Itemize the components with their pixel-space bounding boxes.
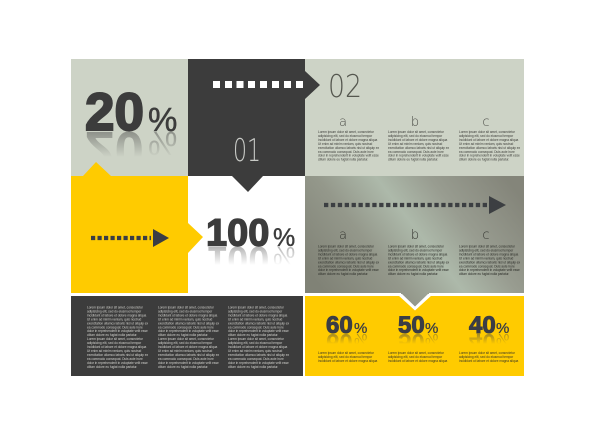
- column b: adipisicing elit, sed do eiusmod tempor: [388, 248, 442, 252]
- column b: cillum dolore eu fugiat nulla pariatur.: [388, 272, 438, 276]
- reflections: 50: [398, 328, 425, 355]
- stat: 40%: 40: [469, 312, 496, 339]
- text column 3: ea commodo consequat. Duis aute irure: [228, 325, 284, 329]
- column c: ea commodo consequat. Duis aute irure: [459, 150, 515, 154]
- text column 1: Ut enim ad minim veniam, quis nostrud: [87, 349, 142, 353]
- stat: 50%: 50: [398, 312, 425, 339]
- panel: dark text: [71, 296, 303, 376]
- reflections: %: [354, 330, 367, 347]
- column a: [318, 228, 380, 276]
- text column 2: dolor in reprehenderit in voluptate velit esse: [158, 329, 219, 333]
- column a: incididunt ut labore et dolore magna aliqua: [318, 252, 377, 256]
- text column 3: dolor in reprehenderit in voluptate velit esse: [228, 329, 289, 333]
- caption 40%: Lorem ipsum dolor sit amet, consectetur: [459, 351, 515, 355]
- column c: [459, 228, 521, 276]
- stat: 50%: %: [425, 320, 438, 337]
- panel: white 100%: [188, 176, 305, 293]
- column b: ea commodo consequat. Duis aute irure: [388, 150, 444, 154]
- text column 2: cillum dolore eu fugiat nulla pariatur.: [158, 365, 208, 369]
- column a: cillum dolore eu fugiat nulla pariatur.: [318, 272, 368, 276]
- caption 50%: Lorem ipsum dolor sit amet, consectetur: [388, 351, 444, 355]
- column c: exercitation ullamco laboris nisi ut aliquip ex: [459, 260, 521, 264]
- text column 3: dolor in reprehenderit in voluptate velit esse: [228, 361, 289, 365]
- text column 1: incididunt ut labore et dolore magna aliqua: [87, 313, 146, 317]
- text column 1: cillum dolore eu fugiat nulla pariatur.: [87, 365, 137, 369]
- caption 50%: adipisicing elit, sed do eiusmod tempor: [388, 355, 442, 359]
- text column 1: adipisicing elit, sed do eiusmod tempor: [87, 341, 141, 345]
- column b: exercitation ullamco laboris nisi ut aliquip ex: [388, 146, 450, 150]
- stat: 20%: [85, 83, 177, 142]
- text column 3: Lorem ipsum dolor sit amet, consectetur: [228, 337, 284, 341]
- column b: Lorem ipsum dolor sit amet, consectetur: [388, 130, 444, 134]
- text column 2: adipisicing elit, sed do eiusmod tempor: [158, 341, 212, 345]
- column b: incididunt ut labore et dolore magna aliqua: [388, 252, 447, 256]
- text column 2: exercitation ullamco laboris nisi ut aliquip ex: [158, 321, 220, 325]
- text column 1: cillum dolore eu fugiat nulla pariatur.: [87, 333, 137, 337]
- column c: [459, 115, 521, 162]
- text column 1: Ut enim ad minim veniam, quis nostrud: [87, 317, 142, 321]
- arrow: long dotted: [324, 196, 506, 214]
- dotted line: white squares: [213, 81, 303, 88]
- text column 3: exercitation ullamco laboris nisi ut aliquip ex: [228, 321, 290, 325]
- column a: a: [339, 115, 347, 130]
- text column 2: cillum dolore eu fugiat nulla pariatur.: [158, 333, 208, 337]
- text column 1: Lorem ipsum dolor sit amet, consectetur: [87, 306, 143, 310]
- text column 1: ea commodo consequat. Duis aute irure: [87, 325, 143, 329]
- text column 2: ea commodo consequat. Duis aute irure: [158, 357, 214, 361]
- reflections: %: [425, 330, 438, 347]
- reflections: 60: [326, 328, 353, 355]
- column a: a: [339, 228, 347, 243]
- column c: Lorem ipsum dolor sit amet, consectetur: [459, 130, 515, 134]
- column c: adipisicing elit, sed do eiusmod tempor: [459, 134, 513, 138]
- column c: incididunt ut labore et dolore magna aliqua: [459, 252, 518, 256]
- text column 1: adipisicing elit, sed do eiusmod tempor: [87, 309, 141, 313]
- text column 3: adipisicing elit, sed do eiusmod tempor: [228, 309, 282, 313]
- column c: cillum dolore eu fugiat nulla pariatur.: [459, 272, 509, 276]
- text column 2: exercitation ullamco laboris nisi ut aliquip ex: [158, 353, 220, 357]
- column b: Lorem ipsum dolor sit amet, consectetur: [388, 244, 444, 248]
- column c: adipisicing elit, sed do eiusmod tempor: [459, 248, 513, 252]
- stat: 60%: 60: [326, 312, 353, 339]
- caption 50%: incididunt ut labore et dolore magna aliqua: [388, 359, 447, 363]
- stat: 100%: 100: [206, 212, 269, 254]
- column b: [388, 228, 450, 276]
- reflection: 20%: 20: [85, 120, 144, 179]
- text column 3: Ut enim ad minim veniam, quis nostrud: [228, 349, 283, 353]
- text column 3: ea commodo consequat. Duis aute irure: [228, 357, 284, 361]
- reflections: 40: [469, 328, 496, 355]
- column b: adipisicing elit, sed do eiusmod tempor: [388, 134, 442, 138]
- text column 2: incididunt ut labore et dolore magna aliqua: [158, 345, 217, 349]
- column c: c: [482, 228, 490, 243]
- column b: b: [411, 228, 419, 243]
- stat: 60%: [326, 312, 367, 339]
- column b: Ut enim ad minim veniam, quis nostrud: [388, 256, 443, 260]
- column c: cillum dolore eu fugiat nulla pariatur.: [459, 158, 509, 162]
- stat: 100%: %: [273, 224, 295, 252]
- column a: Lorem ipsum dolor sit amet, consectetur: [318, 130, 374, 134]
- text column 1: ea commodo consequat. Duis aute irure: [87, 357, 143, 361]
- text column 3: incididunt ut labore et dolore magna aliqua: [228, 345, 287, 349]
- column c: Ut enim ad minim veniam, quis nostrud: [459, 256, 514, 260]
- caption 40%: incididunt ut labore et dolore magna aliqua: [459, 359, 518, 363]
- stat: 20%: 20: [85, 83, 144, 142]
- column b: dolor in reprehenderit in voluptate velit esse: [388, 268, 449, 272]
- column c: Lorem ipsum dolor sit amet, consectetur: [459, 244, 515, 248]
- arrow: dotted dark: [91, 229, 169, 247]
- column a: ea commodo consequat. Duis aute irure: [318, 150, 374, 154]
- text column 2: Lorem ipsum dolor sit amet, consectetur: [158, 306, 214, 310]
- stat: 20%: %: [148, 101, 177, 138]
- column a: [318, 115, 380, 162]
- column a: cillum dolore eu fugiat nulla pariatur.: [318, 158, 368, 162]
- column a: adipisicing elit, sed do eiusmod tempor: [318, 134, 372, 138]
- caption 40%: adipisicing elit, sed do eiusmod tempor: [459, 355, 513, 359]
- column b: ea commodo consequat. Duis aute irure: [388, 264, 444, 268]
- caption 60%: incididunt ut labore et dolore magna aliqua: [318, 359, 377, 363]
- column a: incididunt ut labore et dolore magna aliqua: [318, 138, 377, 142]
- column b: b: [411, 115, 419, 130]
- panel: yellow stats: [305, 292, 524, 376]
- column a: adipisicing elit, sed do eiusmod tempor: [318, 248, 372, 252]
- column c: exercitation ullamco laboris nisi ut aliquip ex: [459, 146, 521, 150]
- stat: 40%: %: [496, 320, 509, 337]
- text column 3: Lorem ipsum dolor sit amet, consectetur: [228, 306, 284, 310]
- panel: yellow arrow: [71, 162, 203, 293]
- notch pointer: [398, 292, 432, 310]
- label: 02: 02: [328, 69, 362, 105]
- reflection: 100%: 100: [206, 238, 269, 280]
- text column 3: incididunt ut labore et dolore magna aliqua: [228, 313, 287, 317]
- column a: Ut enim ad minim veniam, quis nostrud: [318, 142, 373, 146]
- reflections: [326, 328, 509, 355]
- column b: exercitation ullamco laboris nisi ut aliquip ex: [388, 260, 450, 264]
- text column 1: exercitation ullamco laboris nisi ut aliquip ex: [87, 321, 149, 325]
- text column 1: incididunt ut labore et dolore magna aliqua: [87, 345, 146, 349]
- text column 3: cillum dolore eu fugiat nulla pariatur.: [228, 365, 278, 369]
- column c: dolor in reprehenderit in voluptate velit esse: [459, 268, 520, 272]
- column b: Ut enim ad minim veniam, quis nostrud: [388, 142, 443, 146]
- column b: dolor in reprehenderit in voluptate velit esse: [388, 154, 449, 158]
- text column 2: Ut enim ad minim veniam, quis nostrud: [158, 317, 213, 321]
- reflection: 20%: [85, 120, 177, 179]
- column b: incididunt ut labore et dolore magna aliqua: [388, 138, 447, 142]
- text column 2: Lorem ipsum dolor sit amet, consectetur: [158, 337, 214, 341]
- panel: gradient arrow: [305, 176, 524, 293]
- column a: ea commodo consequat. Duis aute irure: [318, 264, 374, 268]
- text column 2: dolor in reprehenderit in voluptate velit esse: [158, 361, 219, 365]
- panel: sage 20%: [71, 59, 188, 176]
- column b: [388, 115, 450, 162]
- panel: dark 01: [188, 59, 320, 192]
- column a: dolor in reprehenderit in voluptate velit esse: [318, 154, 379, 158]
- text column 1: exercitation ullamco laboris nisi ut aliquip ex: [87, 353, 149, 357]
- reflection: 100%: %: [273, 241, 295, 269]
- column a: Ut enim ad minim veniam, quis nostrud: [318, 256, 373, 260]
- column b: cillum dolore eu fugiat nulla pariatur.: [388, 158, 438, 162]
- column a: exercitation ullamco laboris nisi ut aliquip ex: [318, 146, 380, 150]
- stat: 50%: [398, 312, 438, 339]
- text column 3: adipisicing elit, sed do eiusmod tempor: [228, 341, 282, 345]
- text column 2: adipisicing elit, sed do eiusmod tempor: [158, 309, 212, 313]
- column a: dolor in reprehenderit in voluptate velit esse: [318, 268, 379, 272]
- column a: Lorem ipsum dolor sit amet, consectetur: [318, 244, 374, 248]
- reflections: %: [496, 330, 509, 347]
- stat: 60%: %: [354, 320, 367, 337]
- text column 1: dolor in reprehenderit in voluptate velit esse: [87, 329, 148, 333]
- text column 2: ea commodo consequat. Duis aute irure: [158, 325, 214, 329]
- column c: Ut enim ad minim veniam, quis nostrud: [459, 142, 514, 146]
- text column 2: incididunt ut labore et dolore magna aliqua: [158, 313, 217, 317]
- text column 3: Ut enim ad minim veniam, quis nostrud: [228, 317, 283, 321]
- column c: c: [482, 115, 490, 130]
- column c: incididunt ut labore et dolore magna aliqua: [459, 138, 518, 142]
- panel: sage 02: [305, 59, 524, 176]
- column c: ea commodo consequat. Duis aute irure: [459, 264, 515, 268]
- reflection: 20%: %: [148, 125, 177, 162]
- stat: 40%: [469, 312, 509, 339]
- text column 3: exercitation ullamco laboris nisi ut aliquip ex: [228, 353, 290, 357]
- column a: exercitation ullamco laboris nisi ut aliquip ex: [318, 260, 380, 264]
- text column 3: cillum dolore eu fugiat nulla pariatur.: [228, 333, 278, 337]
- text column 1: dolor in reprehenderit in voluptate velit esse: [87, 361, 148, 365]
- text column 1: Lorem ipsum dolor sit amet, consectetur: [87, 337, 143, 341]
- column c: dolor in reprehenderit in voluptate velit esse: [459, 154, 520, 158]
- label: 01: 01: [233, 133, 261, 169]
- text column 2: Ut enim ad minim veniam, quis nostrud: [158, 349, 213, 353]
- caption 60%: adipisicing elit, sed do eiusmod tempor: [318, 355, 372, 359]
- caption 60%: Lorem ipsum dolor sit amet, consectetur: [318, 351, 374, 355]
